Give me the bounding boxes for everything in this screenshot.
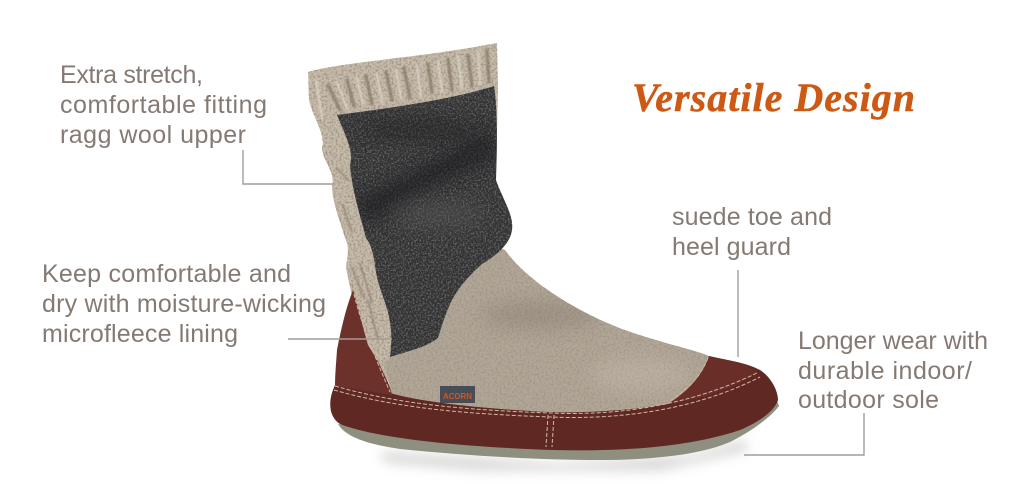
callout: microfleece lining: microfleece lining (42, 320, 238, 348)
dark panel shading (355, 120, 495, 229)
callout: ragg wool upper (60, 61, 267, 149)
dark leg panel (337, 86, 512, 357)
foot wool (384, 245, 709, 416)
foot shading (480, 301, 690, 393)
callout: microfleece lining: Keep comfortable and (42, 260, 291, 288)
callout: microfleece lining: dry with moisture-wicking (42, 290, 326, 318)
leather sole wrap (330, 356, 778, 450)
illustration: slipper sock (308, 43, 779, 470)
leader line: upper (243, 150, 335, 184)
cuff ribbing (316, 50, 489, 340)
callout: durable sole: outdoor sole (798, 386, 939, 414)
toe guard (668, 356, 758, 404)
callout: suede guard: heel guard (672, 233, 791, 261)
callout: ragg wool upper: comfortable fitting (60, 91, 267, 119)
callout: suede guard (672, 203, 832, 261)
callout: durable sole: Longer wear with (798, 327, 988, 355)
leader line: sole (744, 413, 864, 455)
brand tag (440, 386, 475, 403)
grey outsole (338, 398, 779, 460)
brand tag: ACORN (443, 392, 472, 401)
title: Versatile Design (632, 75, 915, 120)
callout: ragg wool upper: Extra stretch, (60, 61, 203, 89)
leader line: lining (288, 338, 392, 340)
leader line: guard (737, 270, 739, 357)
leather heel guard (335, 290, 392, 395)
ground shadow (380, 440, 748, 470)
callout: ragg wool upper: ragg wool upper (60, 121, 246, 149)
callout: suede guard: suede toe and (672, 203, 832, 231)
callout: durable sole (798, 327, 988, 414)
callout: durable sole: durable indoor/ (798, 357, 972, 385)
light wool back and cuff (308, 43, 498, 398)
stitching (334, 294, 760, 447)
callout: microfleece lining (42, 260, 326, 348)
